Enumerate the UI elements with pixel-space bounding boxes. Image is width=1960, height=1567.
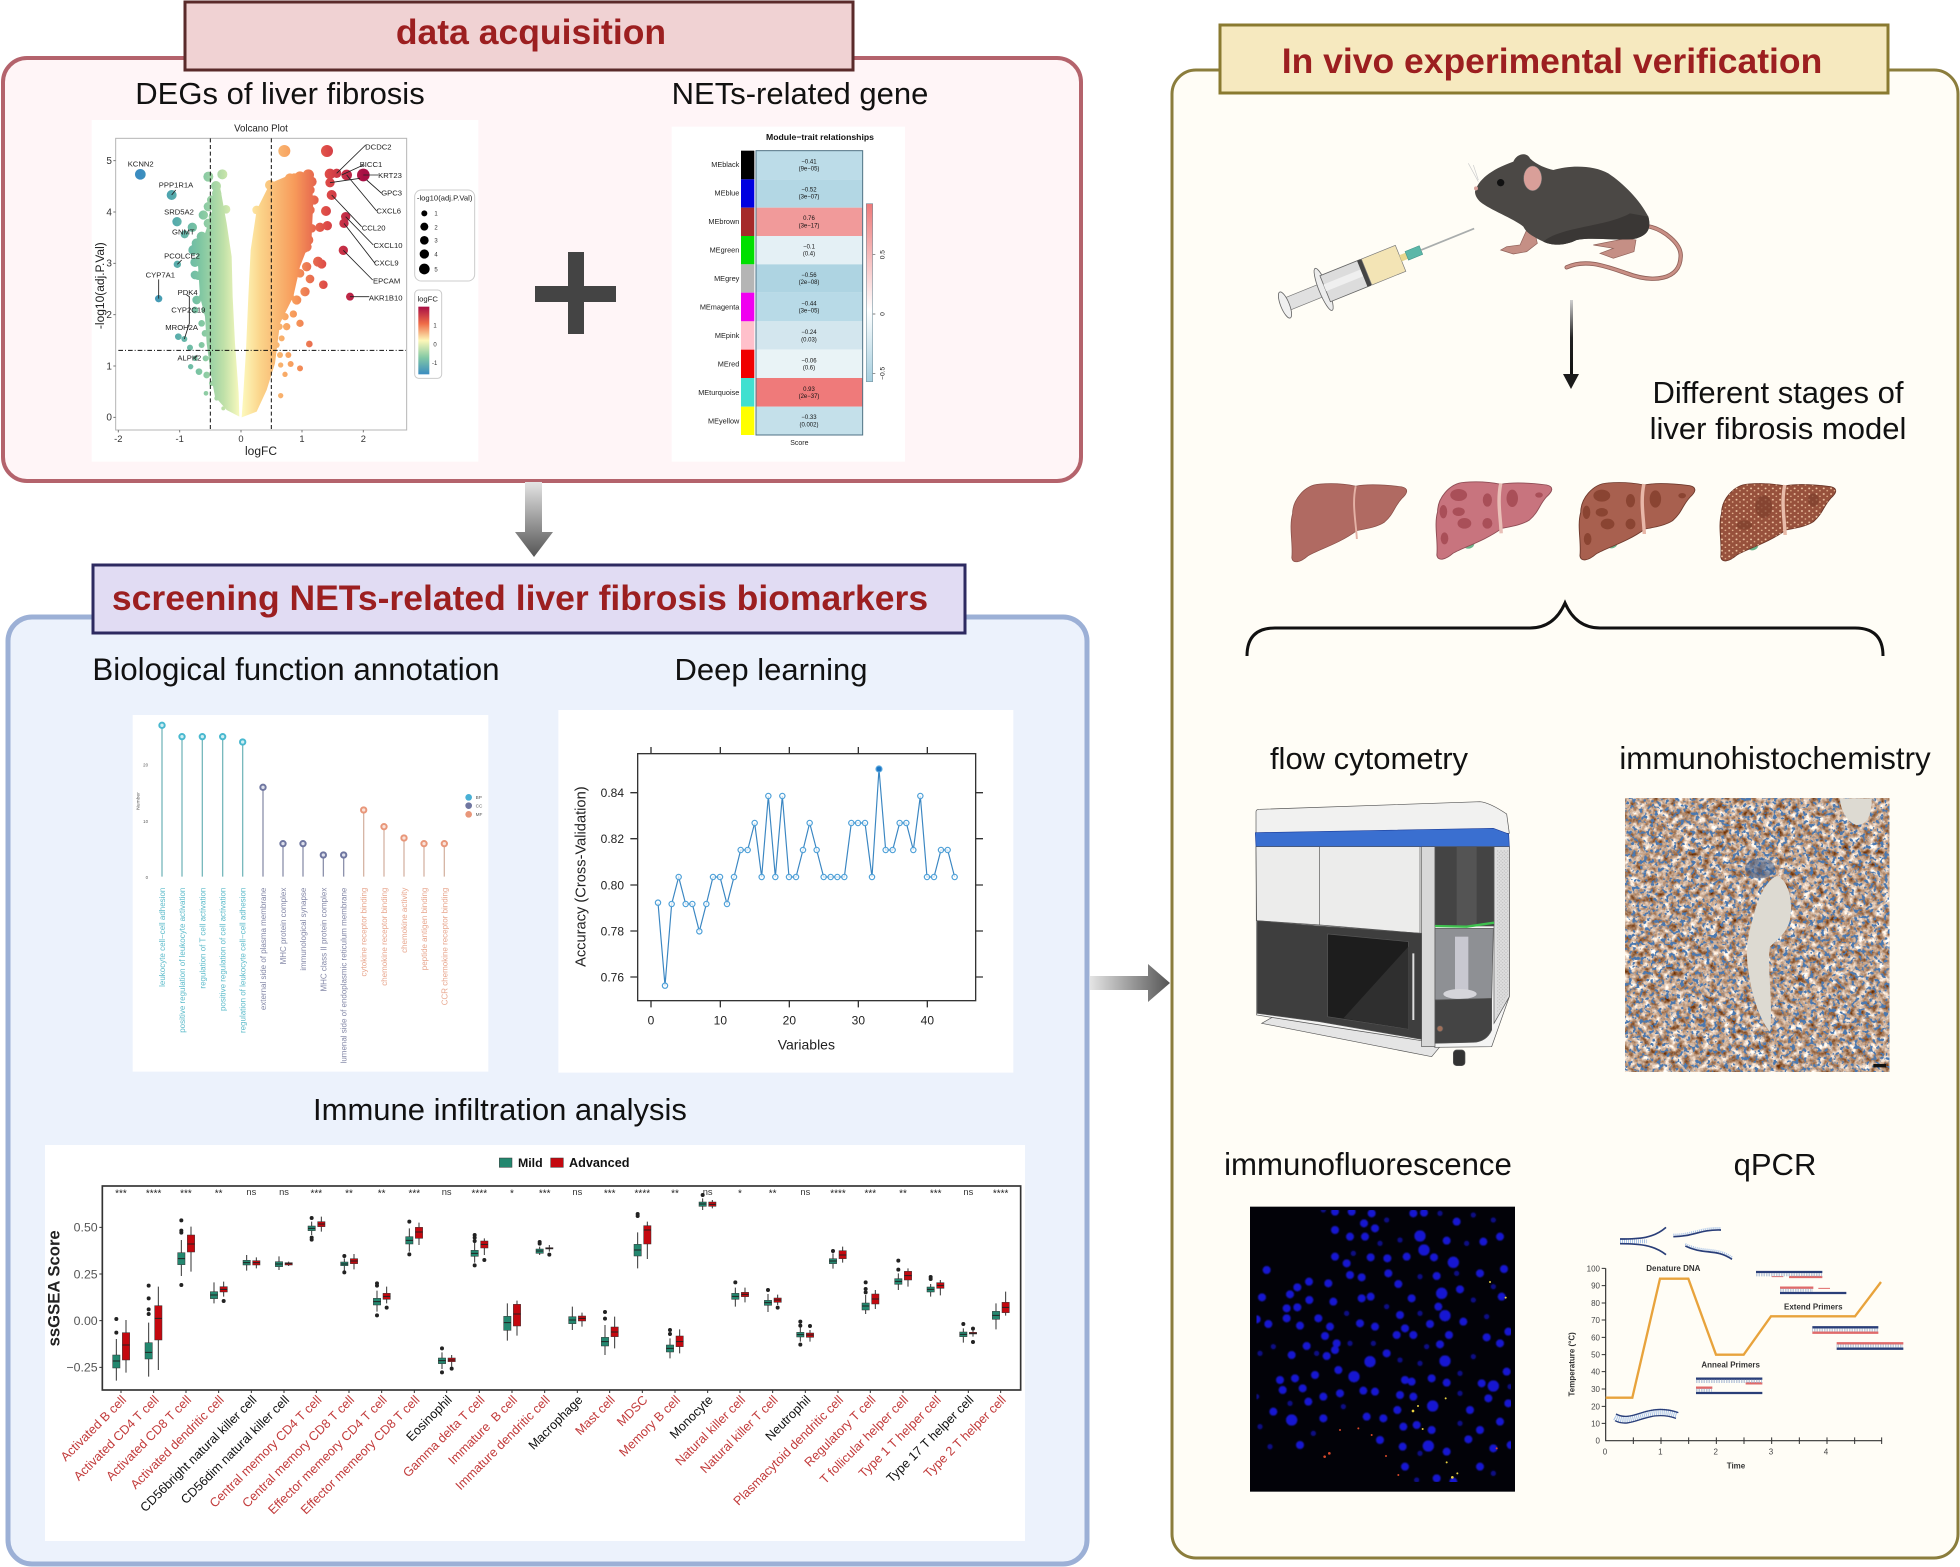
significance marks: ***: [539, 1189, 551, 1200]
significance marks: ***: [864, 1189, 876, 1200]
lollipop term labels: regulation of leukocyte cell−cell adhesion: [239, 888, 248, 1033]
lollipop term labels: CCR chemokine receptor binding: [440, 888, 449, 1005]
significance marks: [115, 1187, 1009, 1200]
cell type labels: Natural killer T cell: [698, 1393, 781, 1476]
lollipop term labels: cytokine receptor binding: [360, 888, 369, 976]
volcano colour legend: [415, 290, 442, 378]
heatmap labels: −0.33: [801, 415, 817, 421]
heatmap labels: MEred: [718, 359, 739, 368]
significance marks: ***: [115, 1189, 127, 1200]
qPCR stage labels: [1646, 1264, 1843, 1370]
liver stage 2: [1436, 482, 1552, 559]
box plot axes: 0.00: [74, 1314, 98, 1328]
heatmap: module-trait relationships: Module−trait relationships: [766, 132, 874, 142]
heading: NETs-related gene: NETs-related gene: [672, 76, 928, 111]
qPCR axes: 80: [1591, 1299, 1601, 1308]
heading: immunohistochemistry: immunohistochemistry: [1619, 741, 1931, 776]
box plot legend: Advanced: [569, 1156, 629, 1170]
box plot axes: −0.25: [66, 1361, 98, 1375]
heatmap labels: MEturquoise: [698, 388, 739, 397]
significance marks: ns: [442, 1187, 452, 1197]
volcano size legend: 2: [434, 225, 438, 231]
heading: flow cytometry: flow cytometry: [1270, 741, 1469, 776]
lollipop term labels: [158, 887, 449, 1063]
lollipop legend: MF: [476, 812, 483, 817]
heading: deep learning: Deep learning: [674, 652, 868, 687]
significance marks: ***: [408, 1189, 420, 1200]
arrow: screening to in vivo verification: [1090, 964, 1170, 1002]
cell type labels: Central memory CD8 T cell: [240, 1393, 357, 1510]
qPCR axes: 50: [1591, 1351, 1601, 1360]
volcano axes and threshold lines: 4: [106, 207, 112, 218]
significance marks: ***: [930, 1189, 942, 1200]
volcano axes and threshold lines: 2: [361, 434, 366, 444]
cell type labels: MDSC: [614, 1393, 650, 1429]
cell type labels: Natural killer cell: [673, 1393, 748, 1468]
volcano colour legend: -1: [432, 361, 438, 367]
heatmap labels: MEyellow: [708, 416, 740, 425]
heading: different stages of liver fibrosis model: [1650, 375, 1906, 446]
volcano axes and threshold lines: logFC: [245, 444, 277, 458]
cell type labels: Immature B cell: [446, 1393, 520, 1467]
box plot axes: 0.50: [74, 1221, 98, 1235]
lollipop term labels: lumenal side of endoplasmic reticulum membrane: [340, 887, 349, 1063]
volcano gene labels: CXCL6: [376, 207, 401, 216]
DNA strands: [1615, 1227, 1903, 1423]
lollipop term labels: external side of plasma membrane: [259, 887, 268, 1010]
lollipop term labels: regulation of T cell activation: [198, 888, 207, 989]
box plot legend: Mild: [518, 1156, 543, 1170]
heatmap labels: (3e−05): [799, 308, 819, 314]
significance marks: ****: [635, 1189, 650, 1200]
lollipop term labels: positive regulation of cell activation: [219, 888, 228, 1011]
qPCR axes: 70: [1591, 1316, 1601, 1325]
heatmap labels: MEgrey: [714, 274, 740, 283]
heatmap labels: 0.76: [803, 216, 815, 222]
cell type labels: Immature dendritic cell: [453, 1393, 553, 1493]
significance marks: **: [378, 1189, 386, 1200]
heatmap labels: −0.56: [801, 273, 817, 279]
box plot legend: [499, 1156, 629, 1170]
heatmap colour bar: [866, 204, 886, 382]
cell type labels: Gamma delta T cell: [400, 1393, 487, 1480]
heatmap labels: [698, 159, 819, 447]
heatmap colour bar: −0.5: [879, 366, 886, 380]
line chart axes: Variables: [778, 1036, 835, 1052]
red and yellow puncta: [1323, 1427, 1498, 1476]
heatmap colour bar: 0: [879, 312, 886, 316]
volcano axes and threshold lines: 2: [106, 310, 112, 321]
qPCR axes: 2: [1713, 1447, 1718, 1456]
heatmap labels: MEgreen: [710, 245, 739, 254]
heading: screening: screening NETs-related liver fibrosis biomarkers: [112, 578, 928, 618]
volcano gene labels: AKR1B10: [369, 294, 402, 303]
cell type labels: Central memory CD4 T cell: [207, 1393, 324, 1510]
qPCR stage labels: Anneal Primers: [1701, 1361, 1761, 1370]
heatmap labels: −0.06: [801, 358, 817, 364]
volcano plot: [92, 120, 478, 462]
heatmap labels: MEpink: [715, 331, 740, 340]
heading: immune infiltration analysis: Immune infiltration analysis: [313, 1092, 687, 1127]
line chart axes: 0.82: [601, 832, 624, 846]
heatmap cells: [756, 151, 863, 435]
heading: qPCR: qPCR: [1734, 1147, 1816, 1182]
qPCR axes: [1567, 1264, 1882, 1470]
volcano gene labels: CXCL9: [374, 259, 399, 268]
cell type labels: Activated dendritic cell: [128, 1393, 227, 1492]
heatmap labels: −0.44: [801, 301, 817, 307]
significance marks: **: [345, 1189, 353, 1200]
line chart axes: 30: [852, 1013, 865, 1027]
heading: data acquisition: data acquisition: [396, 12, 666, 52]
volcano axes and threshold lines: 1: [299, 434, 305, 444]
panel: screening NETs-related liver fibrosis biomarkers: [8, 565, 1087, 1564]
significance marks: ns: [572, 1187, 583, 1197]
volcano gene labels: GPC3: [381, 189, 402, 198]
volcano axes and threshold lines: 0: [106, 413, 112, 424]
lollipop term labels: MHC class II protein complex: [319, 888, 328, 992]
significance marks: ***: [604, 1189, 616, 1200]
lollipop term labels: MHC protein complex: [279, 888, 288, 964]
cell type labels: Memory B cell: [617, 1393, 683, 1459]
volcano axes and threshold lines: -1: [176, 434, 184, 444]
significance marks: ns: [800, 1187, 811, 1197]
heatmap labels: −0.52: [801, 188, 817, 194]
qPCR axes: 0: [1596, 1437, 1601, 1446]
qPCR stage labels: Extend Primers: [1784, 1303, 1843, 1312]
box plot axes: [44, 1186, 1021, 1393]
lollipop term labels: immunological synapse: [299, 887, 308, 971]
line chart axes: 40: [921, 1013, 934, 1027]
temperature curve: [1606, 1279, 1881, 1398]
heatmap labels: (0.6): [803, 366, 815, 372]
qPCR axes: Temperature (°C): [1567, 1332, 1576, 1396]
volcano size legend: 3: [434, 239, 438, 245]
cell type labels: Plasmacytoid dendritic cell: [731, 1393, 846, 1508]
heatmap labels: −0.41: [801, 159, 817, 165]
volcano axes and threshold lines: -2: [114, 434, 122, 444]
icon: flow cytometer: [1255, 802, 1509, 1066]
significance marks: *: [510, 1189, 514, 1200]
significance marks: ns: [963, 1187, 974, 1197]
heatmap labels: (3e−07): [799, 195, 819, 201]
volcano size legend: [415, 190, 475, 281]
significance marks: ****: [993, 1189, 1009, 1200]
volcano gene labels: KRT23: [378, 171, 402, 180]
volcano size legend: 1: [434, 211, 438, 217]
heading: different stages of liver fibrosis model: Different stages of: [1652, 375, 1904, 410]
volcano size legend: -log10(adj.P.Val): [417, 194, 473, 203]
cell type labels: Activated CD4 T cell: [71, 1393, 162, 1484]
heatmap labels: (0.002): [800, 423, 818, 429]
qPCR axes: 1: [1658, 1447, 1663, 1456]
volcano gene labels: BICC1: [360, 160, 382, 169]
volcano axes and threshold lines: 5: [106, 156, 112, 167]
significance marks: ns: [246, 1187, 257, 1197]
heatmap labels: (0.03): [801, 337, 817, 343]
lollipop chart: GO enrichment: [133, 715, 488, 1072]
qPCR axes: 100: [1587, 1264, 1601, 1273]
qPCR axes: 30: [1591, 1385, 1601, 1394]
line chart axes: [573, 747, 983, 1052]
qPCR axes: 0: [1603, 1447, 1608, 1456]
qPCR stage labels: Denature DNA: [1646, 1264, 1701, 1273]
lollipop axis: Number: [135, 792, 141, 810]
volcano gene labels: PCOLCE2: [164, 251, 200, 260]
line chart axes: 20: [783, 1013, 796, 1027]
lollipop axis: [135, 762, 149, 880]
box plot axes: 0.25: [74, 1267, 98, 1281]
heatmap labels: MEmagenta: [700, 302, 740, 311]
heading: in vivo experimental verification: [1220, 25, 1888, 93]
cell type labels: Type 17 T helper cell: [884, 1393, 976, 1486]
significance marks: ****: [830, 1189, 846, 1200]
heatmap labels: Score: [790, 440, 809, 447]
blue nuclei: [1257, 1210, 1511, 1482]
cell type labels: CD56dim natural killer cell: [178, 1393, 292, 1507]
volcano gene labels: PDK4: [178, 288, 198, 297]
heatmap labels: (0.4): [803, 252, 815, 258]
line chart axes: 10: [714, 1013, 727, 1027]
cell type labels: Neutrophil: [763, 1393, 813, 1444]
volcano gene labels: MROH2A: [165, 323, 199, 332]
volcano size legend: 5: [434, 267, 438, 273]
module colour strip: [741, 151, 754, 435]
volcano axes and threshold lines: [93, 124, 407, 458]
line chart axes: 0.80: [601, 878, 624, 892]
significance marks: ***: [310, 1189, 322, 1200]
cell type labels: Type 2 T helper cell: [921, 1393, 1009, 1481]
heading: in vivo experimental verification: In vivo experimental verification: [1282, 41, 1822, 81]
panel: in vivo experimental verification: [1172, 25, 1958, 1558]
volcano axes and threshold lines: -log10(adj.P.Val): [93, 242, 107, 329]
volcano axes and threshold lines: 1: [106, 361, 112, 372]
significance marks: ***: [180, 1189, 192, 1200]
lollipop axis: 10: [143, 819, 149, 824]
qPCR axes: 3: [1769, 1447, 1774, 1456]
significance marks: ****: [146, 1189, 162, 1200]
vessel lumen: [1747, 876, 1791, 1032]
lollipop axis: 20: [143, 762, 149, 767]
line chart: deep learning accuracy: [558, 710, 1013, 1073]
lollipop term labels: peptide antigen binding: [420, 888, 429, 970]
qPCR axes: 10: [1591, 1419, 1601, 1428]
volcano gene labels: SRD5A2: [164, 208, 194, 217]
heading: biological function annotation: Biological function annotation: [92, 652, 500, 687]
volcano gene labels: DCDC2: [365, 143, 392, 152]
cell type labels: [58, 1393, 1009, 1517]
volcano gene labels: GNMT: [172, 227, 195, 236]
heatmap labels: −0.24: [801, 330, 817, 336]
volcano colour legend: 0: [433, 342, 437, 348]
lollipop term labels: chemokine activity: [400, 888, 409, 953]
heatmap labels: (2e−37): [799, 394, 819, 400]
heatmap labels: (9e−05): [799, 166, 819, 172]
volcano gene labels: EPCAM: [373, 276, 400, 285]
cell type labels: Activated B cell: [58, 1393, 129, 1464]
accuracy line and markers: [655, 766, 957, 988]
liver stage 4: [1720, 483, 1836, 561]
image: immunohistochemistry stain: [1625, 798, 1889, 1072]
image: immunofluorescence stain: [1250, 1207, 1515, 1492]
line chart axes: Accuracy (Cross-Validation): [573, 786, 589, 967]
significance marks: **: [671, 1189, 679, 1200]
lollipop legend: BP: [476, 795, 482, 800]
cell type labels: Activated CD8 T cell: [103, 1393, 194, 1484]
volcano colour legend: logFC: [417, 294, 438, 303]
volcano gene labels: CXCL10: [374, 241, 402, 250]
icon: plus sign: [535, 252, 616, 334]
heatmap labels: 0.93: [803, 387, 815, 393]
significance marks: **: [215, 1189, 223, 1200]
cell type labels: Macrophage: [526, 1393, 585, 1453]
lollipop legend: [465, 794, 483, 818]
box plot axes: ssGSEA Score: [44, 1230, 63, 1346]
heatmap labels: MEbrown: [708, 217, 739, 226]
significance marks: ****: [472, 1189, 487, 1200]
qPCR axes: 90: [1591, 1282, 1601, 1291]
cell type labels: Eosinophil: [404, 1393, 455, 1444]
cell type labels: Monocyte: [667, 1393, 716, 1442]
volcano size legend: 4: [434, 253, 438, 259]
arrow: mouse to liver stages: [1563, 300, 1579, 389]
volcano gene labels: CCL20: [362, 224, 386, 233]
volcano gene labels: CYP7A1: [146, 270, 175, 279]
heatmap labels: −0.1: [803, 245, 816, 251]
lollipop stems BP: [159, 723, 245, 877]
cell type labels: Mast cell: [573, 1393, 618, 1438]
heading: data acquisition: [185, 2, 853, 70]
qPCR axes: 60: [1591, 1333, 1601, 1342]
lollipop stems CC: [260, 785, 346, 877]
line chart axes: 0.78: [601, 924, 624, 938]
arrow: data acquisition to screening: [515, 482, 553, 557]
cell type labels: Effector memeory CD4 T cell: [265, 1393, 390, 1517]
qPCR axes: 4: [1824, 1447, 1829, 1456]
cell type labels: T follicular helper cell: [817, 1393, 911, 1487]
lollipop legend: CC: [476, 803, 483, 808]
volcano axes and threshold lines: 3: [106, 259, 112, 270]
lollipop stems MF: [361, 807, 447, 877]
chart: qPCR thermal cycle: [1567, 1227, 1903, 1470]
significance marks: **: [769, 1189, 777, 1200]
volcano axes and threshold lines: Volcano Plot: [234, 124, 288, 135]
heading: DEGs of liver fibrosis: DEGs of liver fibrosis: [135, 76, 425, 111]
qPCR axes: 20: [1591, 1402, 1601, 1411]
lollipop term labels: positive regulation of leukocyte activation: [178, 888, 187, 1033]
significance marks: ns: [703, 1187, 713, 1197]
heading: screening: [93, 565, 965, 633]
volcano points: [135, 145, 370, 417]
icon: mouse: [1468, 154, 1681, 279]
icon: syringe: [1272, 208, 1483, 328]
box pairs: [113, 1195, 1009, 1381]
significance marks: *: [738, 1189, 742, 1200]
heatmap labels: MEblack: [711, 160, 740, 169]
volcano axes and threshold lines: 0: [238, 434, 244, 444]
box plot: ssGSEA immune infiltration: [44, 1145, 1025, 1541]
heatmap colour bar: 0.5: [879, 250, 886, 259]
liver stage 1: [1291, 484, 1407, 562]
cell type labels: CD56bright natural killer cell: [138, 1393, 259, 1515]
line chart axes: 0.84: [601, 786, 624, 800]
volcano gene labels: CYP2C19: [171, 305, 205, 314]
heatmap labels: (3e−17): [799, 223, 819, 229]
line chart axes: 0.76: [601, 970, 624, 984]
qPCR axes: Time: [1727, 1461, 1746, 1470]
brace: [1247, 603, 1883, 656]
cell type labels: Effector memeory CD8 T cell: [298, 1393, 422, 1517]
heading: different stages of liver fibrosis model: liver fibrosis model: [1650, 411, 1906, 446]
volcano gene labels: [128, 143, 402, 362]
heatmap labels: MEblue: [714, 188, 739, 197]
heatmap: module-trait relationships: [672, 127, 905, 462]
line chart axes: 0: [648, 1013, 655, 1027]
livers: fibrosis stages: [1291, 482, 1836, 562]
liver stage 3: [1579, 482, 1695, 560]
volcano gene labels: PPP1R1A: [159, 181, 194, 190]
cell type labels: Regulatory T cell: [802, 1393, 878, 1470]
volcano colour legend: 1: [433, 324, 437, 330]
significance marks: **: [899, 1189, 907, 1200]
volcano gene labels: KCNN2: [128, 160, 154, 169]
lollipop axis: 0: [146, 875, 149, 880]
cell type labels: Type 1 T helper cell: [856, 1393, 944, 1481]
lollipop term labels: chemokine receptor binding: [380, 888, 389, 986]
lollipop term labels: leukocyte cell−cell adhesion: [158, 888, 167, 987]
significance marks: ns: [279, 1187, 289, 1197]
heading: immunofluorescence: immunofluorescence: [1224, 1147, 1512, 1182]
qPCR axes: 40: [1591, 1368, 1601, 1377]
volcano gene labels: ALPK2: [177, 353, 201, 362]
heatmap labels: (2e−08): [799, 280, 819, 286]
